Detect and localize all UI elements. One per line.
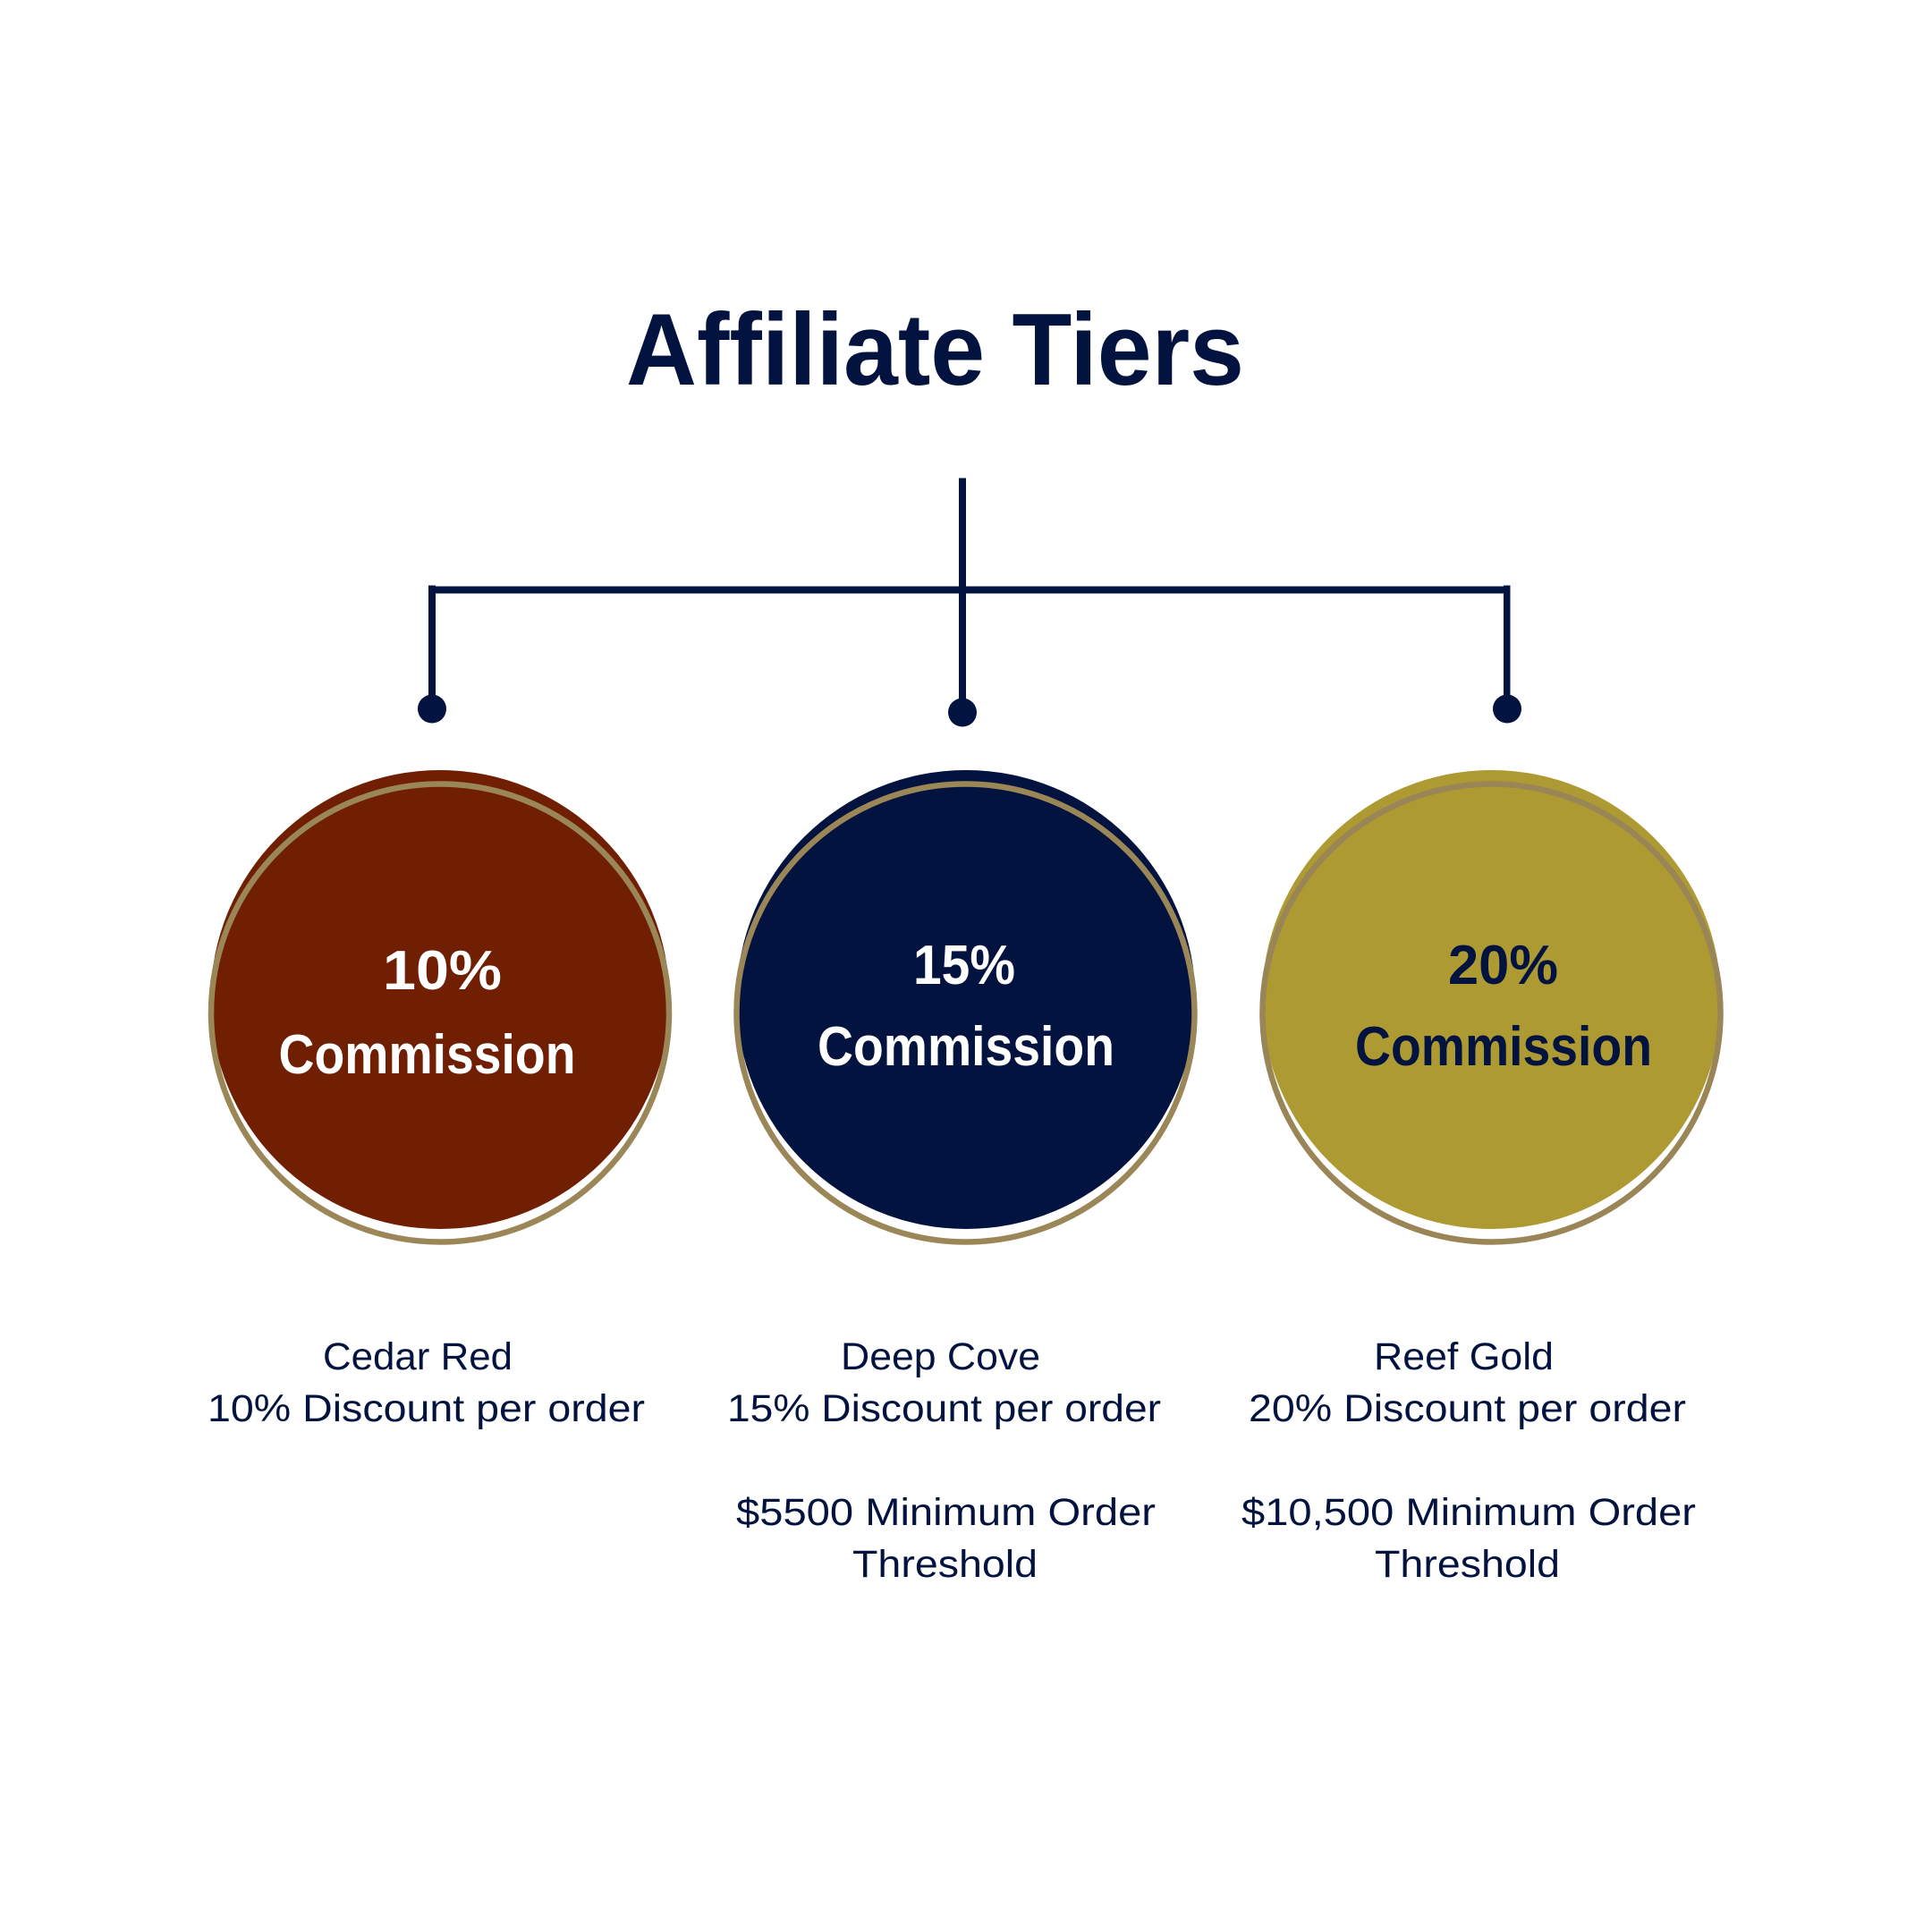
panel: 15% commission circle: Commission (818, 1016, 1114, 1078)
panel: 10% commission circle: Commission (279, 1024, 576, 1086)
text block: Deep Cove: 15% Discount per order (727, 1387, 1161, 1430)
panel: 20% commission circle: 20% (1448, 935, 1558, 996)
panel: 20% commission circle: Commission (1355, 1016, 1652, 1078)
text block: Reef Gold (1241, 1335, 1696, 1586)
text block: Deep Cove: Deep Cove (841, 1335, 1040, 1378)
text block: Deep Cove (727, 1335, 1161, 1586)
panel: 10% commission circle (211, 770, 669, 1241)
text block: Deep Cove: Threshold (852, 1543, 1038, 1586)
text block: Reef Gold: $10,500 Minimum Order (1241, 1491, 1696, 1534)
text block: Reef Gold: Threshold (1375, 1543, 1560, 1586)
text block: Cedar Red (208, 1335, 645, 1430)
title: Affiliate Tiers (626, 293, 1244, 407)
panel: 15% commission circle (737, 770, 1195, 1241)
text block: Cedar Red: Cedar Red (323, 1335, 513, 1378)
text block: Reef Gold: Reef Gold (1374, 1335, 1554, 1378)
text block: Cedar Red: 10% Discount per order (208, 1387, 645, 1430)
panel: 10% commission circle: 10% (383, 940, 502, 1002)
text block: Deep Cove: $5500 Minimum Order (736, 1491, 1156, 1534)
connector tree (418, 478, 1521, 726)
panel: 20% commission circle (1262, 770, 1721, 1241)
panel: 15% commission circle: 15% (913, 935, 1015, 996)
text block: Reef Gold: 20% Discount per order (1249, 1387, 1686, 1430)
